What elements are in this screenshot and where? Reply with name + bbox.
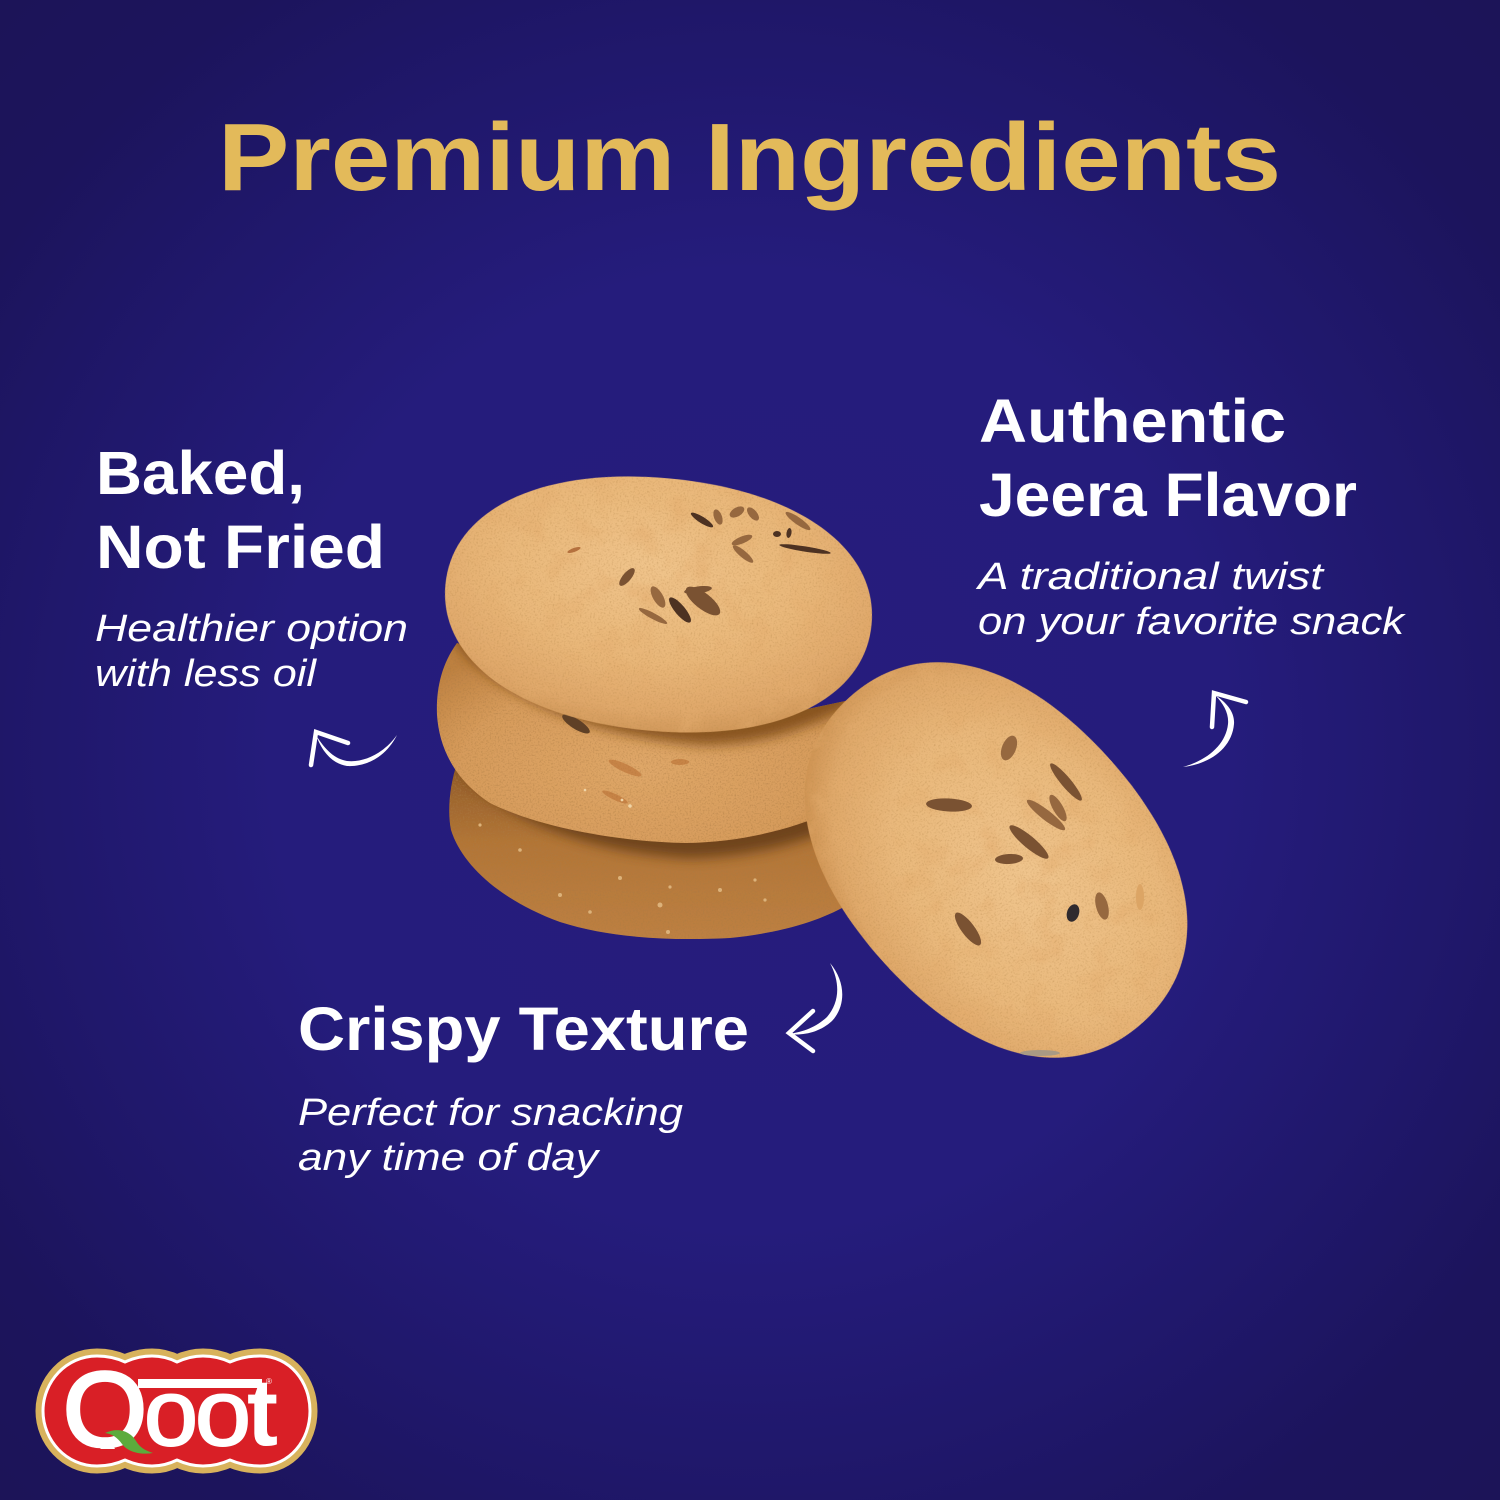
top cookie — [434, 458, 883, 751]
text block: crispy texture — [298, 995, 749, 1179]
seeds on top cookie — [567, 504, 831, 626]
text block: crispy texture: any time of day — [298, 1137, 600, 1179]
cookie stack and leaning cookie — [434, 458, 1255, 1124]
logo badge — [43, 1356, 310, 1466]
logo wordmark — [66, 1370, 277, 1449]
logo: Qoot — [43, 1351, 310, 1469]
text block: authentic jeera flavor: Authentic — [979, 387, 1286, 455]
text block: authentic jeera flavor — [976, 387, 1406, 643]
logo wordmark: ® — [266, 1377, 272, 1386]
bottom cookie — [449, 769, 842, 939]
middle cookie — [436, 643, 846, 843]
logo wordmark: Q — [63, 1351, 147, 1469]
text block: crispy texture: Perfect for snacking — [298, 1092, 683, 1134]
logo wordmark: t — [247, 1359, 278, 1466]
seeds on leaning cookie — [926, 733, 1144, 949]
text block: authentic jeera flavor: on your favorite snack — [978, 601, 1406, 643]
text block: baked not fried: Not Fried — [96, 513, 385, 581]
text block: baked not fried: with less oil — [95, 653, 318, 695]
text block: authentic jeera flavor: A traditional twist — [976, 556, 1325, 598]
text block: baked not fried: Healthier option — [95, 608, 408, 650]
arrow: crispy texture — [788, 963, 842, 1051]
arrow: baked not fried — [311, 732, 397, 766]
text block: authentic jeera flavor: Jeera Flavor — [979, 461, 1357, 529]
logo wordmark: o — [195, 1360, 251, 1465]
text block: baked not fried — [95, 439, 408, 695]
logo leaf — [105, 1430, 153, 1454]
logo wordmark: o — [144, 1360, 198, 1465]
text block: baked not fried: Baked, — [96, 439, 305, 507]
title: Premium Ingredients — [218, 104, 1281, 211]
arrow: jeera flavor — [1183, 693, 1246, 767]
leaning cookie — [737, 596, 1255, 1124]
text block: crispy texture: Crispy Texture — [298, 995, 749, 1063]
